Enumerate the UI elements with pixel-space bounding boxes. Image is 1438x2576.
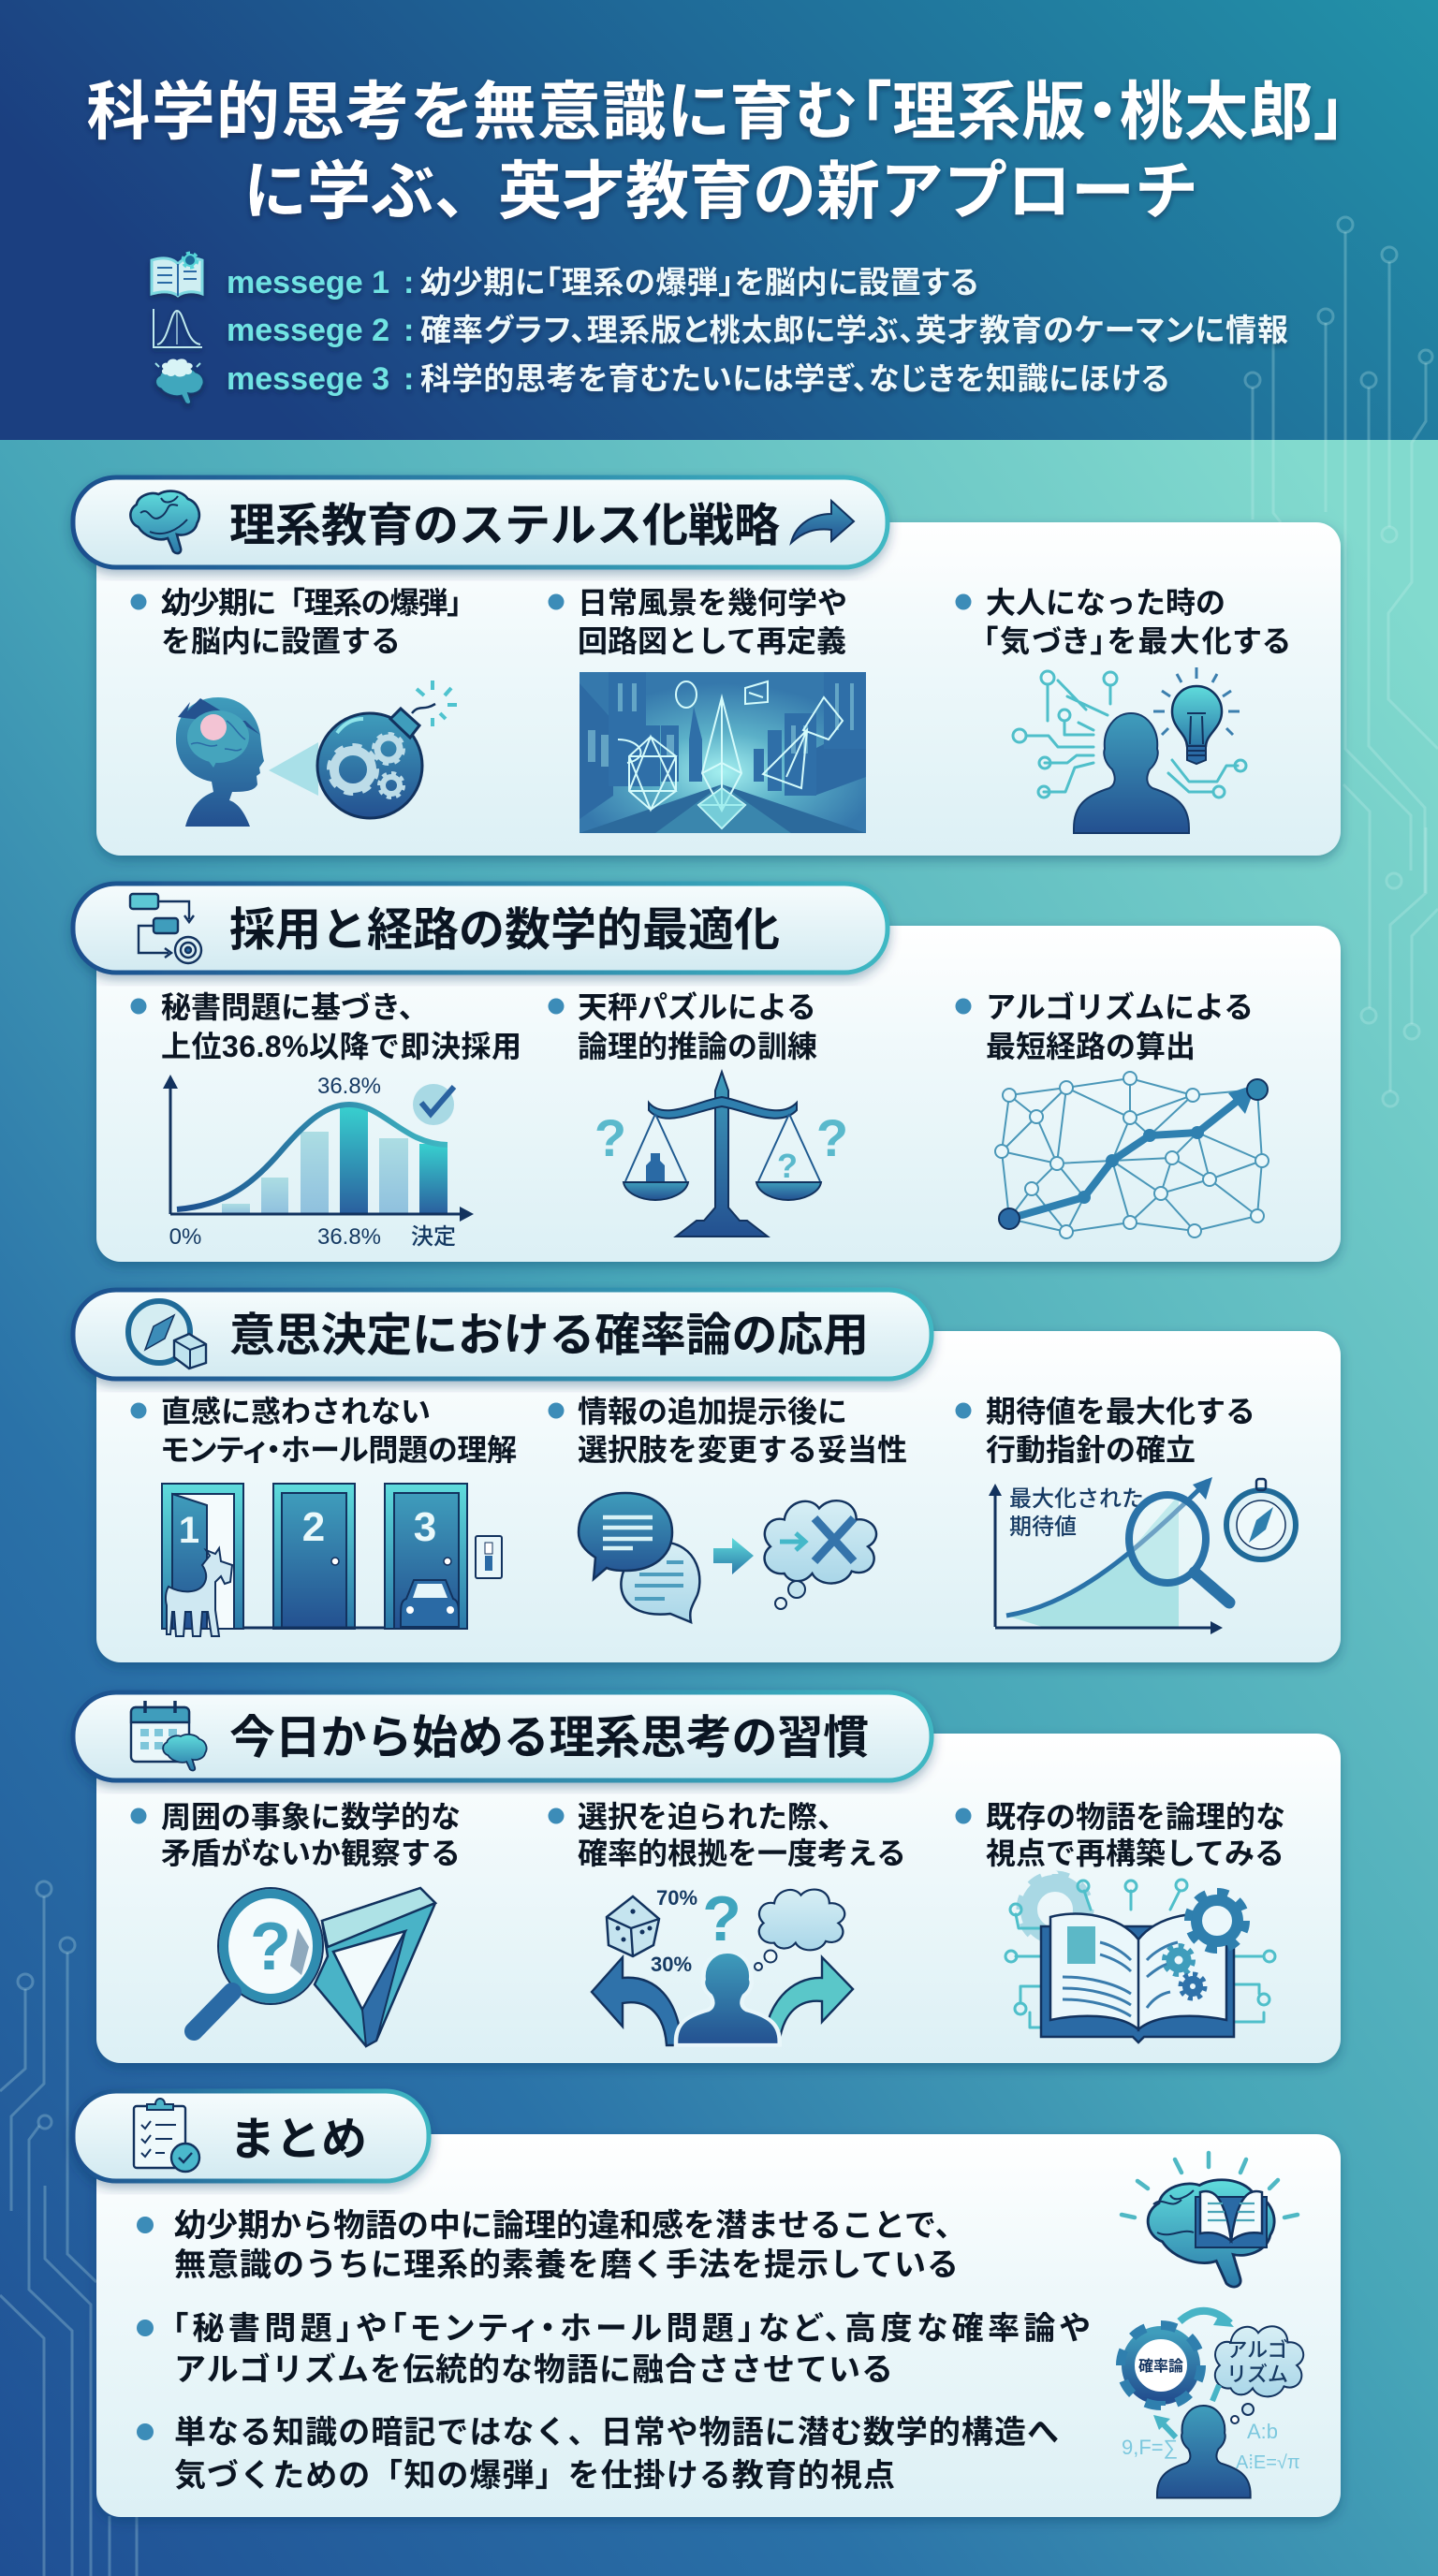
icon: choice person: 30% — [651, 1953, 692, 1976]
summary 3: 気づくための「知の爆弾」を仕掛ける教育的視点 — [174, 2458, 895, 2494]
bullet 2: 論理的推論の訓練 — [578, 1030, 817, 1063]
card — [96, 926, 1341, 1262]
chart: 36.8% curve and bars: 0% — [169, 1224, 201, 1250]
icon: clipboard — [134, 2099, 199, 2172]
icon: brain with book — [1122, 2153, 1298, 2287]
bullet 3 — [955, 990, 1254, 1063]
panel: 数学的最適化 — [73, 884, 1341, 1262]
bullet 2: 日常風景を幾何学や — [578, 586, 847, 620]
icon: person with lightbulb — [1013, 667, 1246, 833]
icon: magnifier and impossible triangle: ? — [250, 1910, 291, 1984]
message 2: : — [404, 313, 414, 348]
bullet 1: を脳内に設置する — [161, 624, 401, 658]
message 1: : — [404, 265, 414, 300]
card — [96, 2134, 1341, 2517]
summary 2 — [137, 2311, 1090, 2388]
title: に学ぶ、英才教育の新アプローチ — [243, 156, 1198, 227]
door 3 with car — [385, 1484, 467, 1629]
pill heading: 意思決定における確率論の応用 — [229, 1310, 869, 1361]
icon: gear, cloud and person: A⁞E=√π — [1236, 2452, 1300, 2473]
summary 3: 単なる知識の暗記ではなく、日常や物語に潜む数学的構造へ — [174, 2415, 1059, 2451]
panel: 理系思考の習慣 — [73, 1692, 1341, 2063]
door 2: 2 — [302, 1504, 325, 1550]
pill heading: 今日から始める理系思考の習慣 — [229, 1713, 869, 1764]
icon: child and bomb — [176, 681, 457, 827]
door 3 with car: 3 — [414, 1504, 436, 1550]
message 3: : — [404, 361, 414, 397]
icon: gear, cloud and person: リズム — [1226, 2363, 1288, 2386]
chart: 36.8% curve and bars: 36.8% — [317, 1224, 381, 1250]
bullet 1: 矛盾がないか観察する — [161, 1837, 461, 1870]
bullet 1 — [131, 1395, 517, 1467]
message 3: 科学的思考を育むたいには学ぎ、なじきを知識にほける — [420, 361, 1169, 396]
icon: magnifier and impossible triangle — [194, 1888, 435, 2046]
bullet 3: 行動指針の確立 — [986, 1433, 1196, 1467]
message 3: messege 3 — [227, 361, 389, 397]
bullet 2: 選択を迫られた際、 — [578, 1800, 847, 1834]
chart: 36.8% curve and bars: 決定 — [411, 1224, 456, 1250]
chart: expected value: 期待値 — [1009, 1515, 1077, 1540]
summary 2: アルゴリズムを伝統的な物語に融合ささせている — [174, 2351, 893, 2388]
icon: balance scale: ? — [816, 1108, 848, 1167]
door 1 with goat: 1 — [179, 1510, 199, 1551]
bullet 2 — [549, 1800, 906, 1870]
icon: choice person — [592, 1883, 853, 2045]
bullet 1: モンティ・ホール問題の理解 — [161, 1433, 517, 1467]
card — [96, 522, 1341, 856]
pill heading — [73, 884, 888, 973]
panel: ステルス化戦略 — [73, 477, 1341, 856]
messages list — [152, 254, 1288, 403]
bullet 3: 大人になった時の — [986, 586, 1225, 620]
bullet 2: 確率的根拠を一度考える — [578, 1837, 906, 1870]
bullet 2: 情報の追加提示後に — [578, 1395, 847, 1428]
bullet 3 — [955, 586, 1290, 658]
message 2: messege 2 — [227, 313, 389, 348]
panel: 確率論の応用 — [73, 1290, 1341, 1662]
icon: book and gear — [152, 254, 202, 296]
bullet 1 — [131, 990, 521, 1063]
bullet 3: 期待値を最大化する — [986, 1395, 1255, 1428]
icon: choice person: 70% — [656, 1886, 697, 1910]
icon: balance scale: ? — [777, 1147, 798, 1185]
icon: three doors — [162, 1484, 502, 1636]
icon: compass and dice — [128, 1301, 206, 1368]
summary 1: 無意識のうちに理系的素養を磨く手法を提示している — [174, 2247, 959, 2283]
icon: speech bubbles to cloud — [579, 1493, 876, 1622]
bullet 2: 選択肢を変更する妥当性 — [578, 1433, 907, 1467]
icon: gear, cloud and person: A:b — [1247, 2420, 1278, 2443]
message 1: messege 1 — [227, 265, 389, 300]
icon: calendar and brain — [131, 1701, 207, 1770]
bullet 1: 幼少期に「理系の爆弾」 — [161, 586, 477, 620]
pill heading — [73, 477, 888, 567]
door 2 — [273, 1484, 355, 1629]
bullet 3 — [955, 1395, 1255, 1467]
pill heading: まとめ — [229, 2115, 367, 2165]
bullet 1: 直感に惑わされない — [161, 1395, 431, 1428]
pill heading — [73, 1290, 932, 1379]
icon: open book with gears — [1005, 1874, 1275, 2042]
bullet 2 — [549, 990, 817, 1063]
chart: expected value: 最大化された — [1009, 1486, 1144, 1512]
chart: expected value — [989, 1477, 1296, 1634]
bullet 3 — [955, 1800, 1285, 1870]
card — [96, 1331, 1341, 1662]
chart: 36.8% curve and bars — [163, 1074, 474, 1250]
pill heading: 理系教育のステルス化戦略 — [229, 501, 780, 551]
summary 1 — [137, 2208, 967, 2283]
bullet 2 — [549, 586, 847, 658]
icon: gear, cloud and person: 確率論 — [1138, 2357, 1183, 2375]
title: 科学的思考を無意識に育む「理系版・桃太郎」 — [86, 77, 1346, 148]
message 1: 幼少期に「理系の爆弾」を脳内に設置する — [420, 265, 978, 300]
title — [86, 77, 1346, 227]
icon: balance scale — [594, 1072, 848, 1237]
bullet 3: 「気づき」を最大化する — [983, 624, 1290, 658]
chart: 36.8% curve and bars: 36.8% — [317, 1074, 381, 1099]
bullet 1: 周囲の事象に数学的な — [161, 1800, 461, 1834]
icon: balance scale: ? — [594, 1108, 626, 1167]
image: geometric city — [580, 672, 866, 833]
bullet 1 — [131, 586, 477, 658]
icon: brain — [130, 491, 199, 553]
icon: flowchart — [130, 894, 201, 963]
icon: network with shortest path — [995, 1072, 1269, 1238]
icon: gear, cloud and person: アルゴ — [1226, 2338, 1288, 2362]
pill heading — [73, 2091, 429, 2181]
bullet 2: 回路図として再定義 — [578, 624, 846, 658]
bullet 2 — [549, 1395, 907, 1467]
header band — [0, 0, 1438, 440]
bullet 1: 秘書問題に基づき、 — [161, 990, 429, 1024]
bullet 1 — [131, 1800, 461, 1870]
icon: probability graph — [154, 309, 202, 347]
summary 2: 「秘書問題」や「モンティ・ホール問題」など、高度な確率論や — [172, 2311, 1090, 2347]
pill heading: 採用と経路の数学的最適化 — [229, 905, 780, 956]
bullet 3: アルゴリズムによる — [986, 990, 1254, 1024]
door 1 with goat — [162, 1484, 243, 1636]
icon: choice person: ? — [702, 1883, 741, 1954]
card — [96, 1734, 1341, 2063]
bullet 3: 既存の物語を論理的な — [986, 1800, 1285, 1834]
bullet 3: 視点で再構築してみる — [986, 1837, 1284, 1870]
icon: brain and cloud — [155, 359, 203, 403]
pill heading — [73, 1692, 932, 1780]
icon: gear, cloud and person: 9,F=∑ — [1122, 2436, 1178, 2459]
bullet 1: 上位36.8%以降で即決採用 — [161, 1030, 521, 1063]
message 2: 確率グラフ、理系版と桃太郎に学ぶ、英才教育のケーマンに情報 — [420, 313, 1288, 347]
bullet 2: 天秤パズルによる — [578, 990, 816, 1024]
summary 3 — [137, 2415, 1059, 2494]
icon: gear, cloud and person — [1121, 2311, 1303, 2498]
bullet 3: 最短経路の算出 — [986, 1030, 1196, 1063]
icon: arrow — [791, 501, 854, 543]
summary 1: 幼少期から物語の中に論理的違和感を潜ませることで、 — [174, 2208, 967, 2244]
panel: まとめ — [73, 2091, 1341, 2517]
